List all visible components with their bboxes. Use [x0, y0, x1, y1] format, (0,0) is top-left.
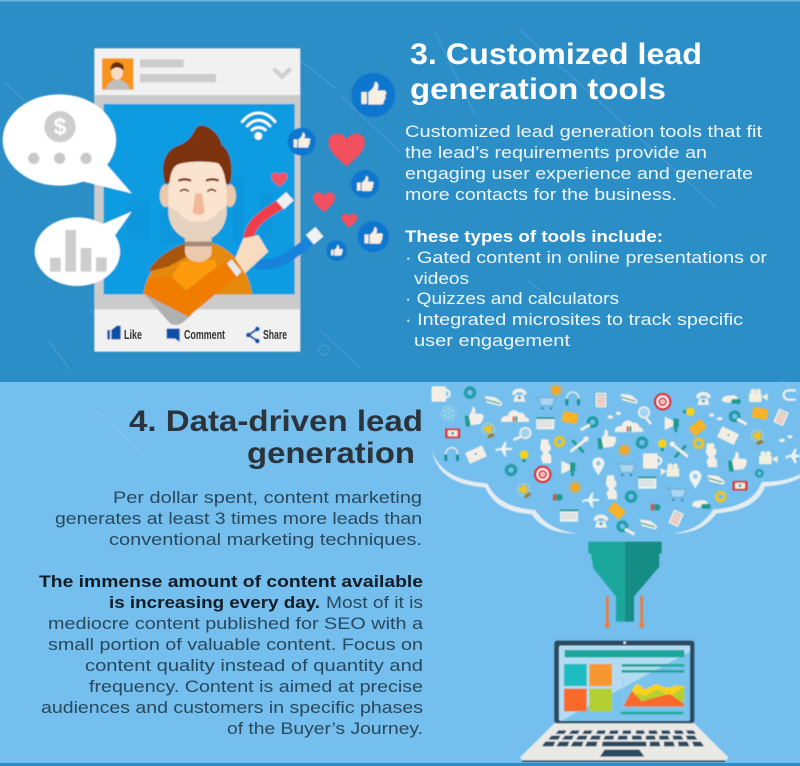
icons: notes	[561, 407, 768, 520]
speech bubble: bar chart	[35, 212, 132, 286]
icons: orange gears	[550, 384, 630, 493]
text block: tools list: These types of tools include:	[405, 227, 663, 246]
bottom edge band	[0, 763, 800, 766]
text block: tools list: · Integrated microsites to track specific	[405, 310, 744, 329]
icons: crossed tools	[570, 436, 688, 457]
icons: calendars	[536, 417, 656, 522]
text block: section 4 detail: audiences and customers in specific phases	[41, 698, 423, 717]
text block: section 4 detail	[39, 572, 424, 738]
text block: tools list: user engagement	[414, 331, 570, 350]
action label: share: Share	[263, 327, 287, 342]
text block: section 3 intro	[405, 122, 762, 204]
icons: video players	[445, 429, 747, 490]
text block: section 4 detail: Most of it is	[326, 593, 423, 612]
icons: telephones	[512, 388, 711, 528]
arrow: left down	[604, 596, 611, 629]
icons: targets	[534, 393, 671, 483]
magnet	[227, 192, 324, 277]
icons: sneakers	[485, 394, 725, 529]
text block: section 4 detail: The immense amount of content available	[39, 572, 423, 591]
icon: large thumbs up bubbles	[288, 73, 395, 261]
illustration: social media post with person and magnet	[3, 48, 395, 352]
laptop	[520, 641, 728, 762]
text block: tools list	[405, 227, 767, 350]
icons: clouds	[501, 410, 643, 432]
text block: section 4 intro: Per dollar spent, content marketing	[113, 488, 422, 507]
text block: section 3 intro: Customized lead generation tools that fit	[405, 122, 762, 141]
laptop base	[520, 723, 728, 761]
post card	[94, 48, 300, 352]
heading: section 3: 3. Customized lead	[410, 38, 702, 71]
heading: section 4	[129, 405, 423, 470]
icons: mugs	[431, 386, 661, 469]
text block: section 4 detail: content quality instead of quantity and	[85, 656, 423, 675]
trackpad	[600, 750, 644, 757]
icons: trophies	[481, 421, 766, 500]
speech bubble: money: $	[54, 114, 67, 140]
action label: like: Like	[124, 327, 142, 342]
icons: teal gears	[464, 387, 764, 503]
arrow: right down	[638, 596, 645, 629]
section background: bottom light blue	[0, 382, 800, 766]
text block: section 3 intro: the lead’s requirements provide an	[405, 143, 707, 162]
heading: section 4: generation	[247, 437, 415, 470]
text block: section 4 detail: is increasing every day.	[109, 593, 320, 612]
icon: atom	[440, 405, 456, 422]
section background: top dark blue	[0, 0, 800, 382]
icon: comment	[167, 329, 180, 342]
funnel	[588, 542, 662, 622]
speech bubble: money	[3, 94, 132, 193]
icons: thumbs	[465, 407, 747, 472]
icons: yellow gears	[554, 436, 726, 502]
text block: section 4 intro: generates at least 3 times more leads than	[55, 509, 422, 528]
icons: puzzle pieces	[540, 439, 717, 499]
screen header bar	[565, 650, 684, 657]
text block: section 4 intro: conventional marketing techniques.	[109, 530, 422, 549]
text block: tools list: · Quizzes and calculators	[405, 289, 619, 308]
cloud outline	[432, 451, 800, 533]
text block: tools list: videos	[414, 269, 469, 288]
text block: section 4 detail: mediocre content published for SEO with a	[48, 614, 424, 633]
post header with avatar	[102, 58, 291, 90]
text block: section 4 detail: of the Buyer’s Journey.	[227, 719, 423, 738]
icons: video cameras	[661, 389, 778, 477]
area chart	[623, 678, 685, 707]
text block: section 4 intro	[55, 488, 422, 549]
heading: section 3	[410, 38, 702, 106]
text block: section 3 intro: engaging user experience and generate	[405, 164, 753, 183]
icon: like	[107, 325, 121, 339]
icons: chat dots	[607, 412, 793, 442]
heading: section 3: generation tools	[410, 73, 666, 106]
illustration: funnel and laptop	[520, 542, 728, 762]
icon: magnet	[784, 390, 796, 400]
icons: planes	[495, 442, 800, 507]
text block: section 3 intro: more contacts for the business.	[405, 185, 677, 204]
illustration: cloud of content icons	[431, 384, 800, 534]
icon: wifi	[242, 113, 275, 139]
icons: megaphones	[561, 417, 679, 476]
icons: light bulbs	[520, 407, 695, 462]
dashboard text lines	[621, 664, 684, 714]
dashboard tiles	[564, 664, 612, 711]
text block: tools list: · Gated content in online presentations or	[405, 248, 767, 267]
icons: magnifiers	[513, 405, 657, 440]
action label: comment: Comment	[184, 327, 225, 342]
icons: calculators	[596, 393, 789, 527]
icon: hearts	[271, 134, 365, 228]
text block: section 4 detail: small portion of valuable content. Focus on	[48, 635, 423, 654]
icon: share	[246, 327, 260, 343]
icons: location pins	[592, 457, 701, 488]
heading: section 4: 4. Data-driven lead	[129, 405, 423, 438]
icons: briefcases	[465, 426, 739, 464]
person	[143, 126, 252, 325]
keyboard	[542, 730, 704, 746]
icons: small badges	[553, 494, 660, 511]
icons: headphones	[444, 392, 580, 461]
icons: gears with wrench	[581, 412, 747, 534]
text block: section 4 detail: frequency. Content is aimed at precise	[89, 677, 423, 696]
icons: shopping carts	[535, 397, 686, 501]
icons: chat clouds	[692, 395, 741, 509]
